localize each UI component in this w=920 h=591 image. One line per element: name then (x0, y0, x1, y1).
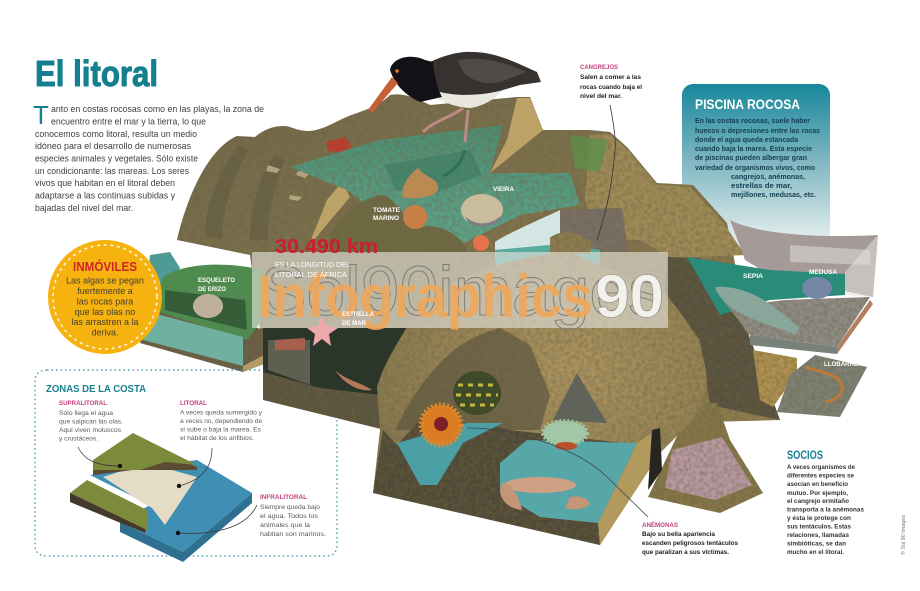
text block: litoral: LITORAL (180, 400, 207, 407)
icon: scallop (461, 194, 503, 226)
text block: socios: relaciones, llamadas (787, 532, 849, 539)
text block: anemonas: ANÉMONAS (642, 520, 679, 529)
text block: piscina rocosa: cuando baja la marea. Esta especie (695, 144, 812, 153)
text block: socios: SOCIOS (787, 448, 823, 462)
icon: green anemone (543, 421, 587, 450)
text block: litoral: el hábitat de los anfibios. (180, 435, 254, 442)
text block: introduction: vivos que habitan en el litoral deben (35, 178, 175, 189)
text block: introduction: encuentro entre el mar y la tierra, lo que (51, 116, 206, 128)
text block: socios: mucho en el litoral. (787, 549, 844, 556)
text block: supralitoral (59, 400, 123, 442)
labels: species on illustration: ESTRELLA (342, 311, 374, 318)
labels: species on illustration: LLOBARRETE (824, 361, 867, 368)
callout: inmoviles: las rocas para (77, 296, 133, 306)
labels: species on illustration: ESQUELETO (198, 277, 235, 284)
text block: socios: A veces organismos de (787, 464, 855, 471)
illustration: pink thrift rock (648, 403, 763, 513)
text block: socios (787, 448, 864, 556)
icon: crab (500, 477, 590, 510)
arrow: anemonas leader line (467, 428, 648, 517)
text block: introduction: conocemos como litoral, resulta un medio (35, 129, 197, 140)
callout: inmoviles: fuertemente a (77, 286, 133, 296)
text block: anemonas: que paralizan a sus víctimas. (642, 549, 729, 556)
text block: cangrejos (580, 64, 642, 100)
text block: infralitoral (260, 494, 326, 538)
text block: socios: sus tentáculos. Estas (787, 524, 851, 530)
text block: supralitoral: SUPRALITORAL (59, 400, 107, 407)
illustration: oystercatcher bird (368, 52, 541, 176)
stat: 30.490 km: LITORAL DE ÁFRICA (275, 270, 347, 279)
text block: piscina rocosa: mejillones, medusas, etc. (731, 190, 816, 199)
callout: inmoviles: deriva. (91, 328, 119, 338)
credit: © Sol 90 Images (900, 514, 907, 555)
heading: zonas de la costa: ZONAS DE LA COSTA (46, 383, 146, 395)
illustration: left tank with urchin skeleton (140, 252, 270, 372)
text block: piscina rocosa: cangrejos, anémonas, (731, 172, 805, 181)
text block: litoral: A veces queda sumergido y (180, 410, 263, 416)
stat: 30.490 km: 30.490 km (275, 236, 378, 258)
text block: cangrejos: rocas cuando baja el (580, 84, 642, 91)
panel: zonas de la costa (35, 370, 337, 562)
text block: introduction (33, 100, 264, 214)
text block: introduction: especies animales y vegetales. Sólo existe (35, 154, 198, 164)
text block: cangrejos: nivel del mar. (580, 93, 622, 100)
stat: 30.490 km: ES LA LONGITUD DEL (275, 260, 350, 269)
text block: anemonas: escanden peligrosos tentáculos (642, 540, 738, 547)
text block: socios: simbióticas, se dan (787, 540, 846, 548)
icon: starfish (307, 316, 338, 346)
illustration: front rock with pools (373, 252, 707, 545)
text block: introduction: adaptarse a las continuas subidas y (35, 190, 175, 202)
text block: piscina rocosa: variedad de organismos vivos, como (695, 163, 815, 172)
labels: species on illustration: VIEIRA (493, 186, 514, 193)
text block: socios: el cangrejo ermitaño (787, 498, 849, 505)
text block: piscina rocosa: de piscinas pueden albergar gran (695, 153, 807, 162)
icon: orange sea creature cluster (402, 168, 438, 198)
panel: piscina rocosa (682, 84, 830, 249)
text block: supralitoral: que salpican las olas. (59, 418, 123, 426)
text block: introduction: anto en costas rocosas como en las playas, la zona de (51, 104, 264, 115)
text block: piscina rocosa: estrellas de mar, (731, 181, 792, 190)
text block: infralitoral: Siempre queda bajo (260, 504, 320, 511)
text block: piscina rocosa: En las costas rocosas, suele haber (695, 116, 810, 125)
icon: cuttlefish (715, 287, 800, 334)
text block: litoral: si sube o baja la marea. Es (180, 426, 262, 434)
text block: anemonas (642, 520, 738, 556)
text block: cangrejos: Salen a comer a las (580, 74, 641, 81)
illustration: upper tide pool (290, 125, 600, 302)
illustration: worm block (753, 350, 867, 417)
watermark: translucent band: 90 (595, 263, 664, 330)
callout: inmoviles: Las algas se pegan (66, 276, 144, 286)
watermark: translucent band: Infographics (257, 263, 593, 330)
title: El litoral (35, 53, 158, 94)
icon: yellow algae (453, 371, 501, 415)
text block: introduction: T (33, 100, 49, 130)
text block: socios: transporta a la anémonas (787, 506, 864, 514)
illustration: back rock mass (177, 94, 780, 430)
text block: litoral (180, 400, 263, 442)
text block: cangrejos: CANGREJOS (580, 64, 619, 71)
text block: supralitoral: Aquí viven moluscos (59, 427, 122, 434)
labels: species on illustration (198, 186, 867, 368)
text block: infralitoral: el agua. Todos los (260, 513, 319, 520)
icon: orange anemone (473, 235, 489, 251)
text block: piscina rocosa (695, 116, 820, 199)
text block: anemonas: Bajo su bella apariencia (642, 531, 715, 538)
text block: piscina rocosa: donde el agua queda estancada (695, 135, 799, 144)
callout: inmoviles: INMÓVILES (73, 259, 137, 274)
text block: piscina rocosa: huecos o depresiones entre las rocas (695, 126, 820, 135)
labels: species on illustration: DE ERIZO (198, 286, 226, 293)
stat: 30.490 km (275, 236, 378, 279)
text block: introduction: bajadas del nivel del mar. (35, 203, 133, 214)
labels: species on illustration: DE MAR (342, 320, 366, 327)
text block: socios: diferentes especies se (787, 472, 854, 480)
text block: infralitoral: INFRALITORAL (260, 494, 307, 501)
labels: species on illustration: SEPIA (743, 273, 763, 280)
text block: introduction: un condicionante: las mareas. Los seres (35, 166, 189, 177)
text block: socios: y ésta le protege con (787, 515, 851, 522)
text block: supralitoral: Sólo llega el agua (59, 410, 113, 417)
watermark: translucent band: Sol90images (260, 252, 663, 330)
illustration: right tank with cuttlefish and jellyfish (665, 220, 878, 420)
text block: litoral: a veces no, dependiendo de (180, 418, 262, 425)
labels: species on illustration: MEDUSA (809, 269, 837, 276)
diagram: coastal zones block (70, 433, 257, 562)
callout: inmoviles (48, 240, 162, 354)
heading: piscina rocosa: PISCINA ROCOSA (695, 97, 800, 112)
text block: infralitoral: habitan son marinos. (260, 531, 326, 538)
text block: infralitoral: animales que la (260, 522, 310, 529)
text block: socios: mutuo. Por ejemplo, (787, 490, 848, 497)
text block: introduction: idóneo para el desarrollo de numerosas (35, 141, 191, 152)
labels: species on illustration: MARINO (373, 215, 399, 222)
callout: inmoviles: las arrastren a la (71, 317, 139, 327)
text block: supralitoral: y crustáceos. (59, 436, 98, 442)
labels: species on illustration: TOMATE (373, 207, 401, 214)
icon: sea tomato (403, 205, 427, 229)
text block: socios: asocian en beneficio (787, 481, 848, 488)
icon: orange urchin-anemone (421, 405, 461, 445)
illustration: central block with starfish (263, 328, 410, 430)
callout: inmoviles: que las olas no (75, 307, 135, 317)
icon: jellyfish (802, 277, 832, 299)
icon: urchin skeleton (193, 294, 223, 318)
arrow: cangrejos leader line (597, 105, 615, 240)
